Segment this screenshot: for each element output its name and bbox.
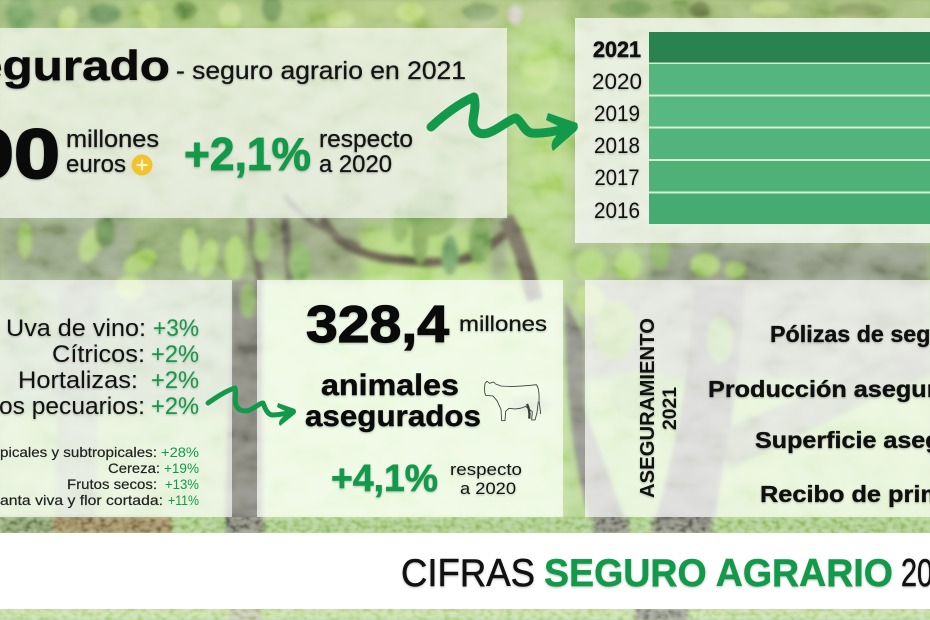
panel: animales asegurados [257,280,563,517]
year labels: 2016 [594,198,640,223]
list: main increases: +3% [153,315,199,342]
lower strip [0,517,930,533]
year labels: 2019 [594,101,640,126]
list: main increases: Uva de vino: [6,315,146,342]
panel: yearly chart [575,18,930,243]
vertical heading [637,318,681,498]
year labels: 2017 [594,165,640,190]
icon: yellow plus [132,154,152,176]
figure: +4,1% respecto a 2020 [331,458,522,500]
heading: animales asegurados: animales [321,369,459,402]
list: other increases: picales y subtropicales: [0,444,157,460]
figure: millones de euros: euros [66,151,126,178]
vertical heading: ASEGURAMIENTO [637,318,659,498]
list: main increases: Hortalizas: [18,367,138,394]
arrow: crops to animals [208,388,296,426]
list: main increases: +2% [151,393,199,420]
figure: +4,1% respecto a 2020: a 2020 [460,479,516,498]
figure: +2,1% respecto a 2020: +2,1% [184,128,311,180]
heading: capital asegurado: - seguro agrario en 2021 [176,57,466,85]
list: other increases: +28% [161,444,199,460]
figure: millones de euros: millones [66,126,159,153]
panel: crops [0,280,232,517]
year labels: 2020 [592,69,642,94]
list: other increases: Frutos secos: [67,476,157,492]
list: other increases: Cereza: [108,460,160,476]
footer band [0,533,930,609]
heading: animales asegurados [305,369,481,433]
figure: +2,1% respecto a 2020 [184,126,413,180]
list: main increases: Cítricos: [52,341,145,368]
list: main increases: +2% [151,341,199,368]
leaves [6,0,34,32]
rows: insurance metrics [708,321,930,507]
figure: 328,4 millones [306,296,547,354]
panel: capital asegurado [0,28,507,218]
title: CIFRAS [401,552,535,595]
year labels: 2018 [594,133,640,158]
figure: millones de euros [0,115,159,193]
list: other increases: +19% [164,460,199,476]
list: other increases: anta viva y flor cortada: [0,492,163,508]
figure: 328,4 millones: millones [459,313,547,336]
year labels [592,37,642,223]
figure: 328,4 millones: 328,4 [306,296,449,354]
figure: +2,1% respecto a 2020: respecto [319,126,413,153]
list: other increases: +11% [168,492,199,508]
bar chart: years 2016-2021 [649,32,930,224]
heading: animales asegurados: asegurados [305,400,481,433]
vertical heading: 2021 [660,387,681,430]
list: main increases [0,315,199,420]
heading: capital asegurado [0,42,466,89]
title [401,552,930,595]
title: SEGURO AGRARIO [544,552,893,595]
list: other increases: +13% [165,476,199,492]
figure: +4,1% respecto a 2020: respecto [450,460,522,479]
arrow: capital to chart [431,97,578,151]
list: main increases: os pecuarios: [0,393,145,420]
icon: cow [485,381,541,421]
list: other increases [0,444,199,508]
panel: aseguramiento 2021 [585,280,930,517]
figure: +4,1% respecto a 2020: +4,1% [331,458,438,500]
year labels: 2021 [593,37,641,62]
trunks and branches [225,280,262,533]
list: main increases: +2% [151,367,199,394]
figure: +2,1% respecto a 2020: a 2020 [319,151,392,178]
